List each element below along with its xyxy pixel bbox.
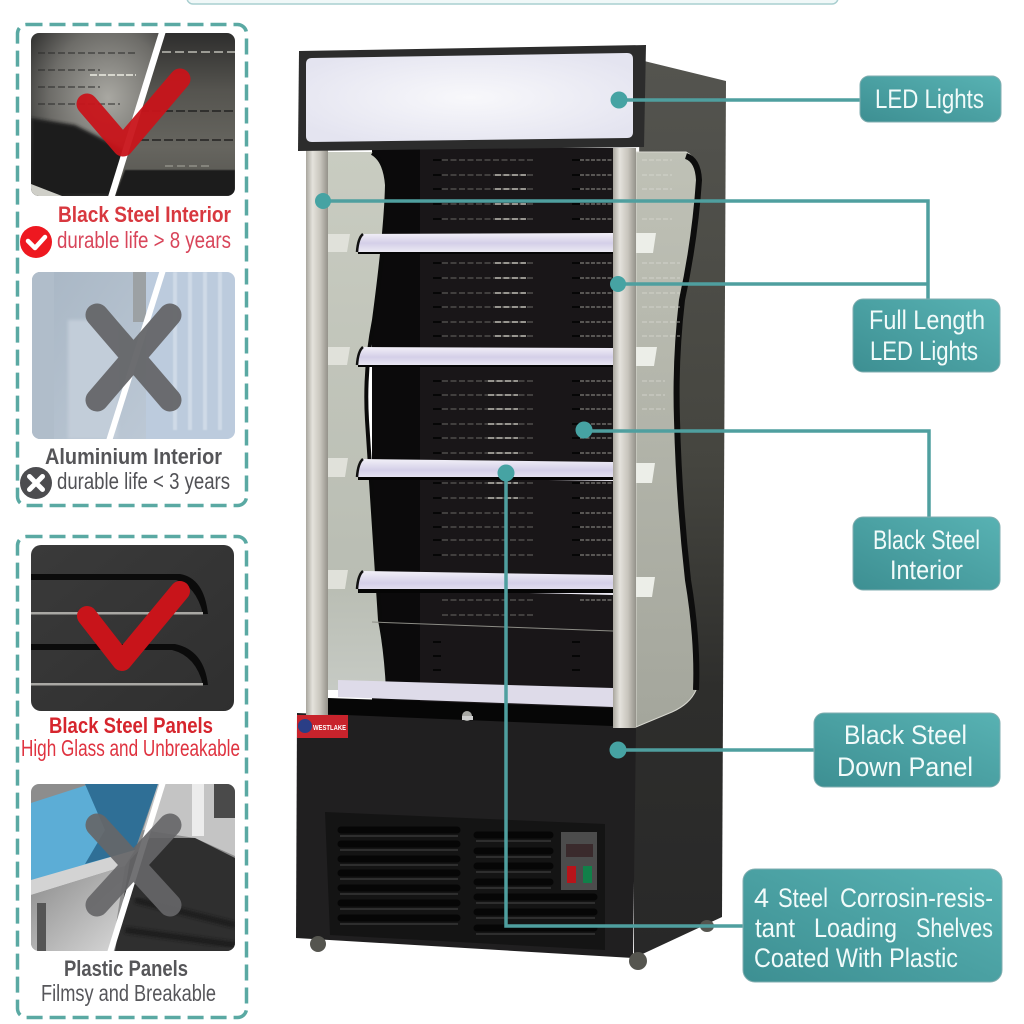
right glass reflections of perforations bbox=[642, 160, 680, 409]
callout line: loading shelves bbox=[498, 464, 744, 926]
dashed frame: interior bbox=[18, 24, 246, 506]
shelf 3 bbox=[357, 459, 613, 481]
shelf 2 bbox=[357, 347, 613, 367]
callout lines: full length LED lights bbox=[315, 193, 928, 300]
photo: black steel panels bbox=[31, 545, 234, 711]
label: black steel interior bbox=[853, 517, 1000, 590]
text: durable life under 3 years: durable life < 3 years bbox=[57, 468, 230, 494]
glass line bbox=[372, 622, 613, 631]
heading: black steel panels: Black Steel Panels bbox=[49, 713, 213, 738]
label: black steel down panel: Black Steel bbox=[844, 720, 967, 750]
shelf 1 bbox=[357, 233, 613, 254]
photo: plastic panels bbox=[31, 782, 235, 953]
callout line: LED lights bbox=[610, 92, 862, 108]
left shelf end brackets bbox=[328, 234, 350, 589]
label: loading shelves: Steel bbox=[778, 883, 828, 913]
right post bbox=[613, 148, 636, 728]
westlake logo bbox=[297, 715, 348, 738]
icon: red check badge bbox=[20, 226, 52, 258]
top banner edge bbox=[187, 0, 838, 4]
icon: grey cross badge bbox=[20, 467, 52, 499]
callout line: down panel bbox=[610, 742, 816, 758]
heading: aluminium interior: Aluminium Interior bbox=[45, 444, 222, 469]
right shelf end brackets bbox=[636, 233, 657, 597]
label: loading shelves: Corrosin-resis- bbox=[840, 883, 993, 913]
label: loading shelves: Coated With Plastic bbox=[754, 943, 958, 973]
text: high glass and unbreakable: High Glass and Unbreakable bbox=[21, 735, 240, 761]
icon: grey cross on photo bbox=[97, 315, 170, 400]
control panel bbox=[561, 832, 597, 890]
dashed frame: panels bbox=[18, 536, 246, 1018]
top light box frame bbox=[298, 45, 646, 151]
left glass side bbox=[326, 152, 388, 690]
icon: red check on photo bbox=[87, 79, 180, 146]
label: black steel down panel bbox=[814, 713, 1000, 787]
base front panel bbox=[296, 713, 636, 958]
photo: aluminium interior bbox=[32, 270, 235, 441]
right glass trim bbox=[677, 156, 699, 690]
casters bbox=[310, 920, 714, 970]
right glass side bbox=[636, 152, 699, 727]
label: loading shelves: Loading bbox=[814, 913, 897, 943]
cabinet side panel bbox=[634, 60, 726, 958]
panel: exterior panel comparison bbox=[18, 536, 246, 1018]
heading: black steel interior: Black Steel Interior bbox=[58, 202, 231, 227]
left louvers bbox=[341, 830, 457, 918]
westlake logo: WESTLAKE bbox=[313, 723, 346, 732]
right louvers bbox=[477, 835, 594, 928]
photo: black steel interior bbox=[31, 30, 235, 198]
text: durable life over 8 years: durable life > 8 years bbox=[57, 227, 231, 253]
heading: plastic panels: Plastic Panels bbox=[64, 956, 188, 981]
label: LED lights bbox=[860, 76, 1001, 122]
bottom shelf bbox=[338, 680, 613, 707]
callout line: black steel interior bbox=[576, 422, 929, 518]
label: full length LED lights: Full Length bbox=[869, 305, 985, 335]
label: black steel down panel: Down Panel bbox=[837, 752, 973, 782]
louver highlights bbox=[340, 836, 595, 934]
condenser vent housing bbox=[325, 812, 605, 950]
icon: grey cross on plastic photo bbox=[97, 825, 170, 905]
label: black steel interior: Interior bbox=[890, 555, 963, 585]
black band under bottom shelf bbox=[328, 698, 613, 728]
label: loading shelves: 4 bbox=[754, 883, 769, 913]
label: loading shelves: Shelves bbox=[916, 913, 993, 943]
left glass trim bbox=[366, 153, 388, 690]
lock bbox=[462, 711, 473, 721]
left post bbox=[306, 150, 328, 720]
back panel perforations: left column bbox=[433, 160, 535, 670]
label: LED lights: LED Lights bbox=[875, 84, 984, 114]
label: loading shelves: tant bbox=[755, 913, 795, 943]
label: full length LED lights: LED Lights bbox=[870, 336, 978, 366]
panel: interior comparison bbox=[18, 24, 246, 506]
label: loading shelves bbox=[743, 869, 1002, 982]
interior back bbox=[372, 148, 614, 708]
refrigerated display cabinet bbox=[296, 45, 726, 970]
shelf 4 bbox=[357, 571, 613, 595]
illuminated sign panel bbox=[306, 53, 633, 142]
label: black steel interior: Black Steel bbox=[873, 525, 980, 555]
label: full length LED lights bbox=[853, 299, 1000, 372]
icon: red check on panel photo bbox=[87, 591, 180, 661]
text: filmsy and breakable: Filmsy and Breakable bbox=[41, 980, 216, 1006]
interior dark left column bbox=[372, 148, 420, 708]
back panel perforations: right column bbox=[572, 160, 613, 670]
